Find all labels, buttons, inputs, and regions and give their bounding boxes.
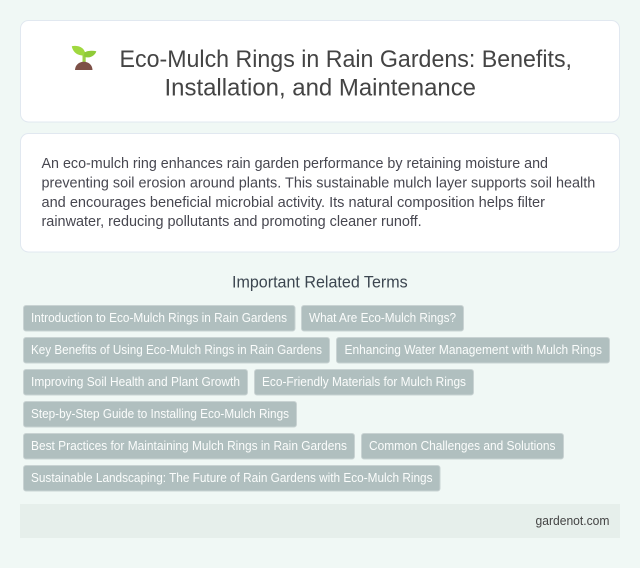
tag <box>24 434 354 459</box>
tag: Common Challenges and Solutions <box>369 438 556 453</box>
related terms tags <box>24 306 610 491</box>
description text: preventing soil erosion around plants. This sustainable mulch layer supports soil health <box>42 176 595 192</box>
icon: seedling <box>72 46 96 70</box>
footer <box>20 504 620 538</box>
tag: Enhancing Water Management with Mulch Rings <box>344 342 602 357</box>
tag <box>24 370 248 395</box>
tag <box>24 306 295 331</box>
description text: and encourages beneficial microbial activity. Its natural composition helps filter <box>42 195 545 211</box>
tag <box>254 370 474 395</box>
tag: Best Practices for Maintaining Mulch Rings in Rain Gardens <box>31 438 347 453</box>
tag: Introduction to Eco-Mulch Rings in Rain Gardens <box>31 310 287 325</box>
tag <box>336 338 610 363</box>
tag <box>24 338 330 363</box>
tag: Improving Soil Health and Plant Growth <box>31 374 240 389</box>
tag: Sustainable Landscaping: The Future of Rain Gardens with Eco-Mulch Rings <box>31 470 432 485</box>
title: Eco-Mulch Rings in Rain Gardens: Benefits, <box>120 47 572 73</box>
tag <box>302 306 464 331</box>
tag: Step-by-Step Guide to Installing Eco-Mulch Rings <box>31 406 289 421</box>
tag <box>24 402 296 427</box>
tag: Eco-Friendly Materials for Mulch Rings <box>262 374 466 389</box>
description text: An eco-mulch ring enhances rain garden performance by retaining moisture and <box>42 156 548 172</box>
panel: description <box>20 134 620 252</box>
tag: What Are Eco-Mulch Rings? <box>309 310 456 325</box>
title <box>120 47 572 102</box>
tag <box>362 434 564 459</box>
heading: related terms: Important Related Terms <box>232 274 408 292</box>
footer site name: gardenot.com <box>536 513 610 528</box>
description text: rainwater, reducing pollutants and promoting cleaner runoff. <box>42 214 422 230</box>
tag: Key Benefits of Using Eco-Mulch Rings in Rain Gardens <box>31 342 322 357</box>
description text <box>42 156 595 230</box>
header panel <box>20 20 620 122</box>
title: Installation, and Maintenance <box>164 76 476 102</box>
tag <box>24 466 440 491</box>
